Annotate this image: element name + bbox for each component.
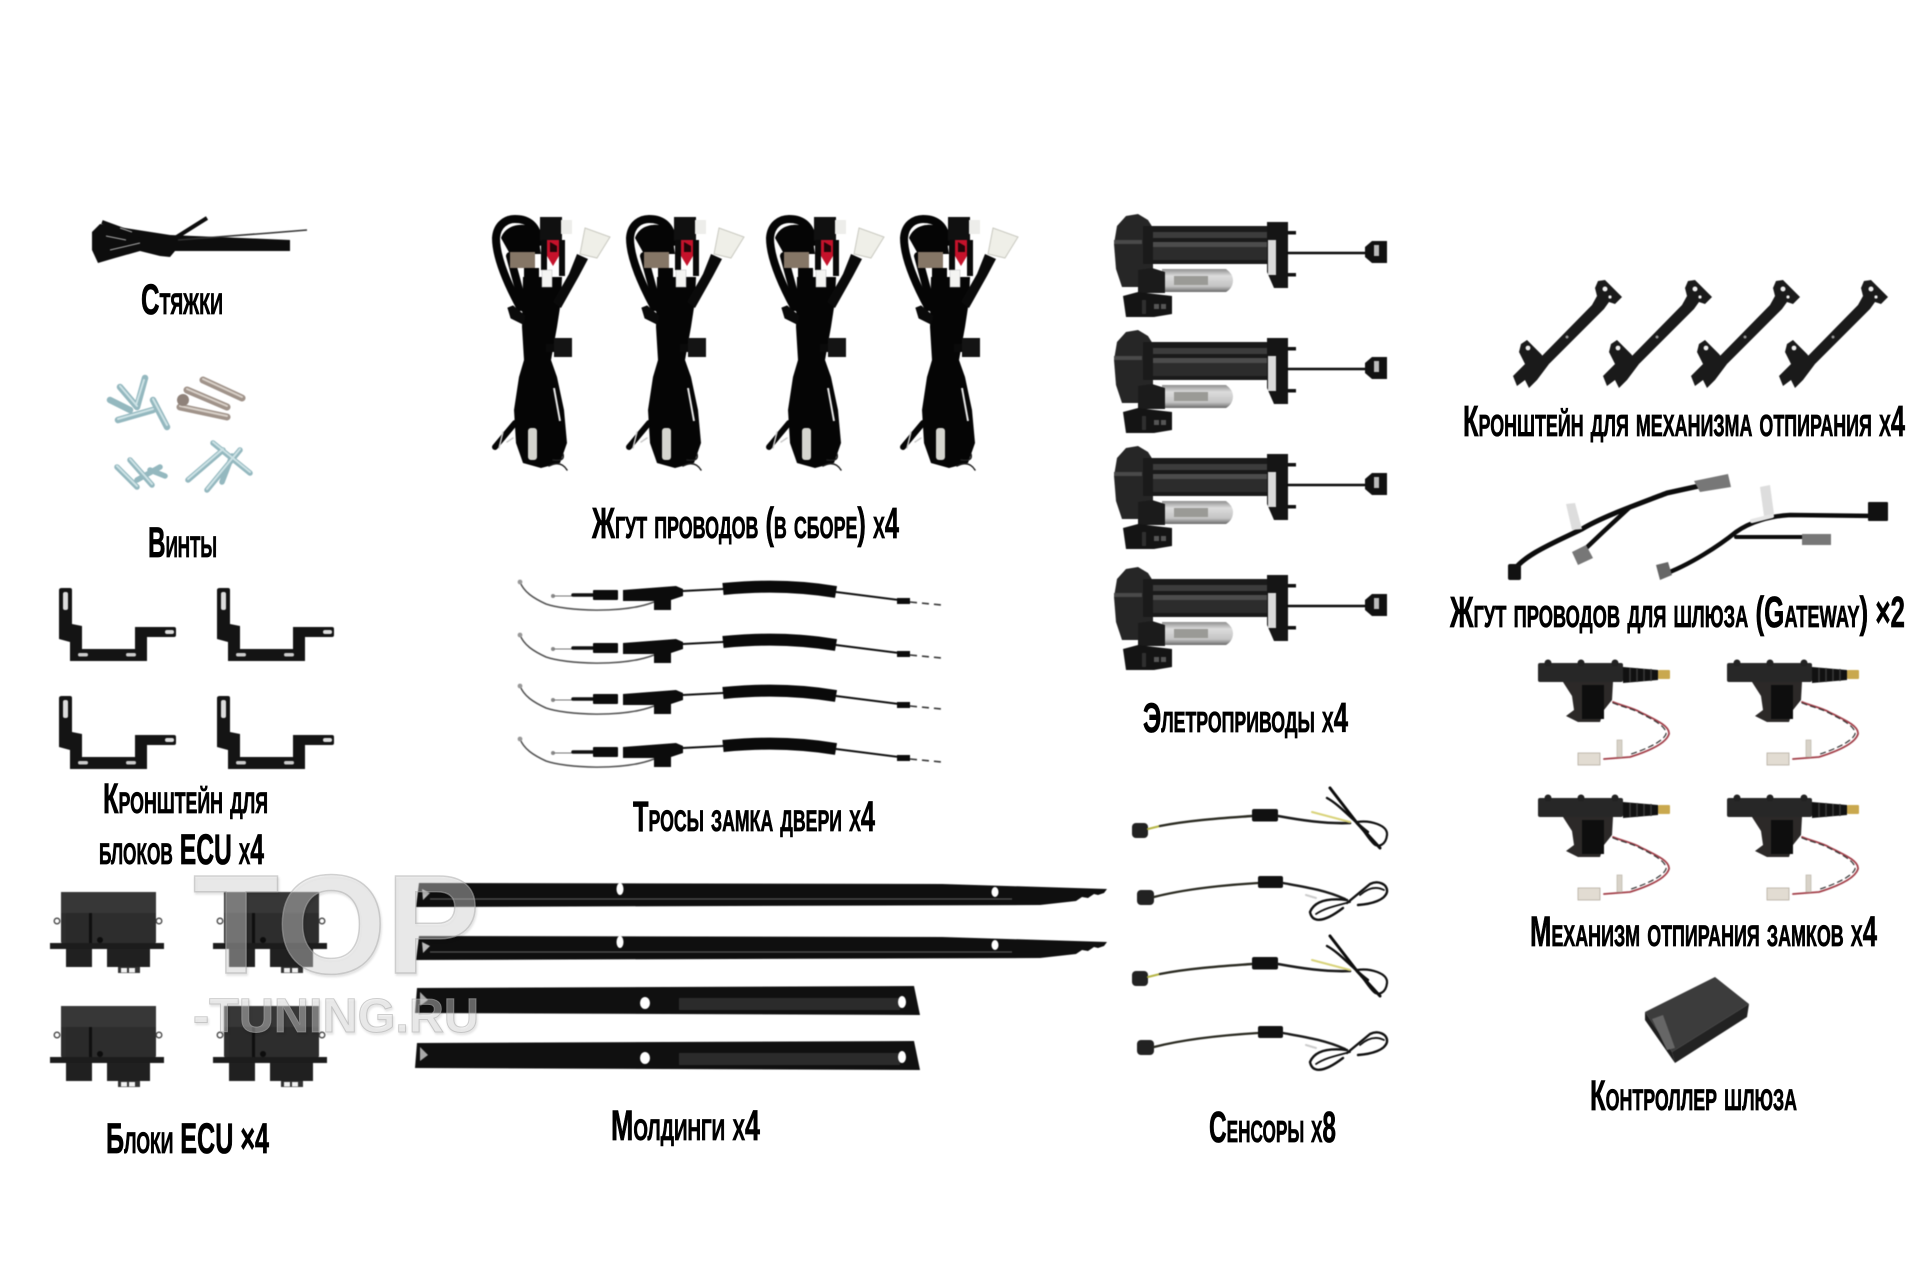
- icon: screws: [110, 378, 250, 490]
- watermark: Top-Tuning.ru: -TUNING.RU: [193, 990, 479, 1043]
- icon: ECU units: [50, 892, 327, 1087]
- label: wiring harnesses: Жгут проводов (в сборе) x4: [591, 499, 899, 548]
- icon: gateway wiring harnesses: [1508, 474, 1888, 580]
- icon: wiring harnesses: [495, 217, 1018, 470]
- watermark: Top-Tuning.ru: TOP: [193, 845, 480, 1003]
- icon: unlock mechanism brackets: [1513, 280, 1888, 388]
- icon: gateway controller: [1645, 977, 1749, 1063]
- icon: ECU brackets: [59, 588, 334, 769]
- label: door moldings: Молдинги x4: [611, 1102, 760, 1150]
- label: cable ties: Стяжки: [141, 276, 223, 324]
- label: ECU brackets: блоков ECU x4: [99, 826, 264, 874]
- label: sensors: Сенсоры x8: [1209, 1103, 1336, 1152]
- label: screws: Винты: [148, 519, 217, 567]
- icon: sensors: [1132, 788, 1387, 1070]
- label: electric actuators: Элетроприводы x4: [1143, 694, 1348, 741]
- icon: electric actuators: [1114, 214, 1387, 670]
- icon: cable ties: [92, 218, 307, 263]
- icon: lock unlock mechanisms: [1538, 660, 1859, 900]
- label: ECU units: Блоки ECU ×4: [106, 1115, 269, 1163]
- label: ECU brackets: Кронштейн для: [103, 775, 268, 823]
- icon: door moldings: [415, 883, 1107, 1070]
- label: door lock cables: Тросы замка двери x4: [633, 793, 875, 841]
- label: ECU brackets: [99, 775, 268, 874]
- icon: door lock cables: [518, 580, 942, 767]
